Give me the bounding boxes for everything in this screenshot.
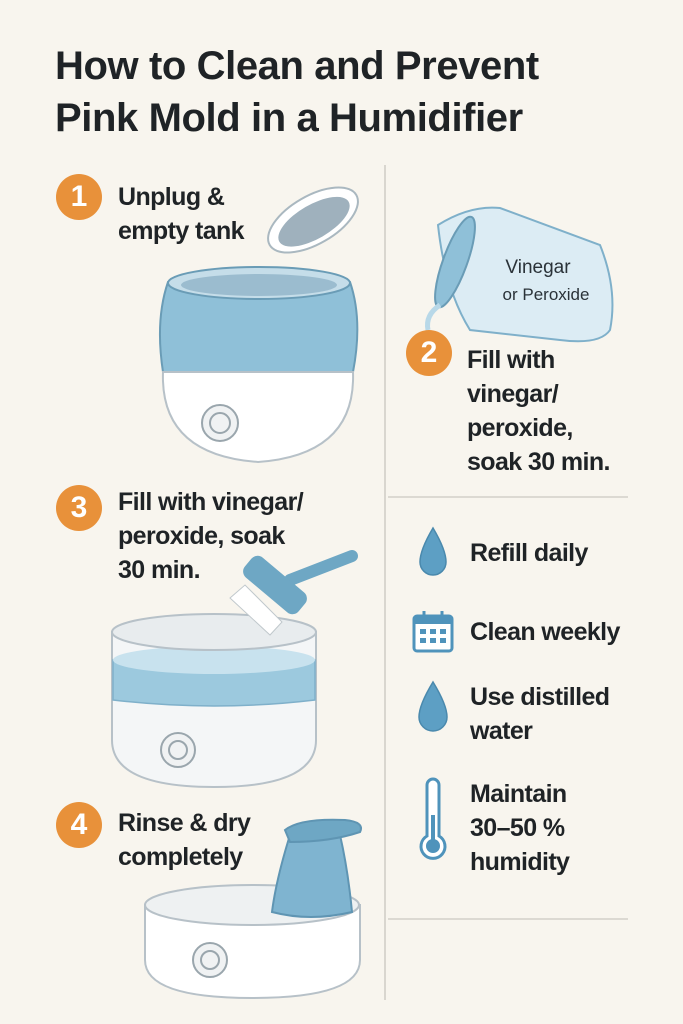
- text: soak 30 min.: [467, 448, 610, 476]
- text: Fill with: [467, 346, 555, 374]
- title: How to Clean and Prevent: [55, 44, 539, 88]
- icon: thermometer: [421, 779, 445, 858]
- step 4: 4: [71, 808, 87, 841]
- title: [55, 44, 539, 140]
- icon: pitcher: Vinegar: [505, 257, 571, 278]
- icon: drop 2: [419, 682, 447, 731]
- step 1: [56, 174, 102, 220]
- title: Pink Mold in a Humidifier: [55, 96, 523, 140]
- icon: pitcher: [427, 208, 612, 341]
- humidifier 4: [145, 820, 361, 998]
- step 3: [56, 485, 102, 531]
- tip: distilled water: Use distilled: [470, 683, 609, 711]
- tip: distilled water: water: [470, 717, 532, 745]
- icon: drop 1: [420, 528, 446, 575]
- icon: lid: [258, 174, 368, 266]
- step 2: [406, 330, 452, 376]
- step 1: 1: [71, 180, 87, 213]
- humidifier 1: [160, 267, 357, 462]
- text: vinegar/: [467, 380, 558, 408]
- tip: humidity: humidity: [470, 848, 569, 876]
- text: empty tank: [118, 217, 244, 245]
- icon: pitcher: or Peroxide: [503, 285, 589, 304]
- tip: humidity: 30–50 %: [470, 814, 564, 842]
- text: Fill with vinegar/: [118, 488, 303, 516]
- tip: refill daily: Refill daily: [470, 539, 588, 567]
- text: Unplug &: [118, 183, 224, 211]
- text: completely: [118, 843, 243, 871]
- tip: humidity: Maintain: [470, 780, 567, 808]
- text: peroxide,: [467, 414, 573, 442]
- step 4: [56, 802, 102, 848]
- text: peroxide, soak: [118, 522, 285, 550]
- text: Rinse & dry: [118, 809, 250, 837]
- step 2: 2: [421, 336, 437, 369]
- humidifier 3 with brush: [112, 553, 352, 787]
- tip: humidity: [470, 780, 570, 876]
- text: 30 min.: [118, 556, 200, 584]
- tip: clean weekly: Clean weekly: [470, 618, 620, 646]
- step 3: 3: [71, 491, 87, 524]
- tip: distilled water: [470, 683, 609, 745]
- icon: calendar: [414, 611, 452, 651]
